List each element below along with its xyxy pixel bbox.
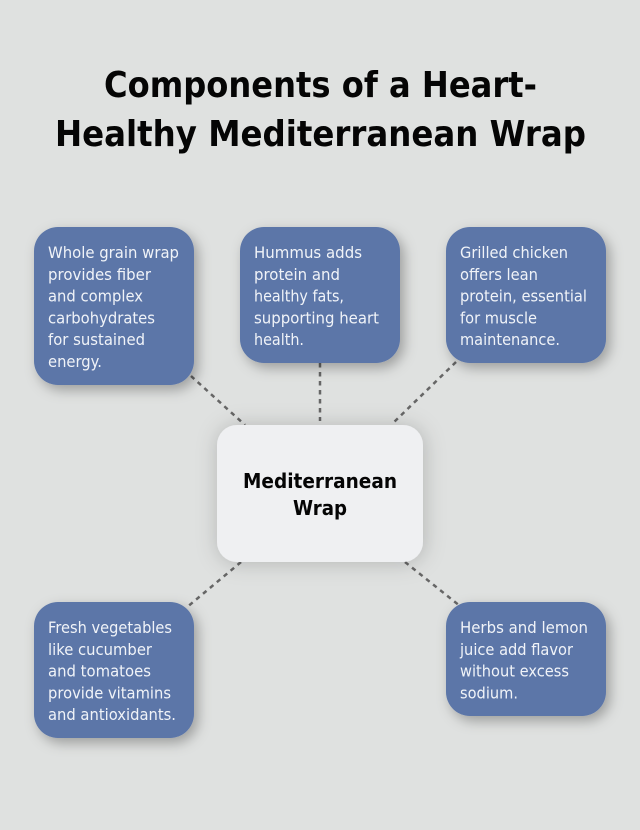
- panel: whole grain wrap: [34, 227, 194, 385]
- panel: hummus: protein and: [254, 265, 340, 284]
- panel: grilled chicken: Grilled chicken: [460, 243, 568, 262]
- panel: hummus: health.: [254, 330, 304, 349]
- dashed connectors: [186, 362, 460, 608]
- panel: fresh vegetables: and antioxidants.: [48, 705, 176, 724]
- panel: fresh vegetables: and tomatoes: [48, 662, 151, 680]
- panel: herbs and lemon: sodium.: [460, 683, 518, 702]
- panel: center node: [217, 425, 423, 562]
- panel: whole grain wrap: provides fiber: [48, 265, 151, 284]
- panel: hummus: healthy fats,: [254, 286, 344, 306]
- panel: whole grain wrap: energy.: [48, 352, 102, 371]
- panel: hummus: [240, 227, 400, 363]
- panel: herbs and lemon: [446, 602, 606, 716]
- title: [55, 65, 586, 155]
- panel: grilled chicken: [446, 227, 606, 363]
- panel: fresh vegetables: Fresh vegetables: [48, 618, 172, 637]
- panel: whole grain wrap: and complex: [48, 286, 143, 306]
- panel: herbs and lemon: Herbs and lemon: [460, 618, 588, 637]
- panel: fresh vegetables: [34, 602, 194, 738]
- panel: herbs and lemon: juice add flavor: [459, 640, 573, 659]
- panel: center node: Mediterranean: [243, 469, 397, 493]
- panel: center node: Wrap: [293, 496, 347, 520]
- panel: whole grain wrap: Whole grain wrap: [48, 243, 179, 262]
- panel: herbs and lemon: without excess: [460, 662, 569, 680]
- panel: hummus: Hummus adds: [254, 243, 362, 262]
- title: Components of a Heart-: [104, 65, 537, 106]
- panel: whole grain wrap: carbohydrates: [48, 308, 155, 327]
- title: Healthy Mediterranean Wrap: [55, 114, 586, 155]
- panel: fresh vegetables: provide vitamins: [48, 683, 171, 702]
- panel: hummus: supporting heart: [254, 308, 379, 327]
- panel: grilled chicken: offers lean: [460, 265, 538, 284]
- panel: fresh vegetables: like cucumber: [48, 640, 152, 659]
- panel: grilled chicken: protein, essential: [460, 286, 587, 306]
- panel: whole grain wrap: for sustained: [48, 330, 145, 349]
- panel: grilled chicken: for muscle: [460, 308, 537, 327]
- panel: grilled chicken: maintenance.: [460, 330, 560, 349]
